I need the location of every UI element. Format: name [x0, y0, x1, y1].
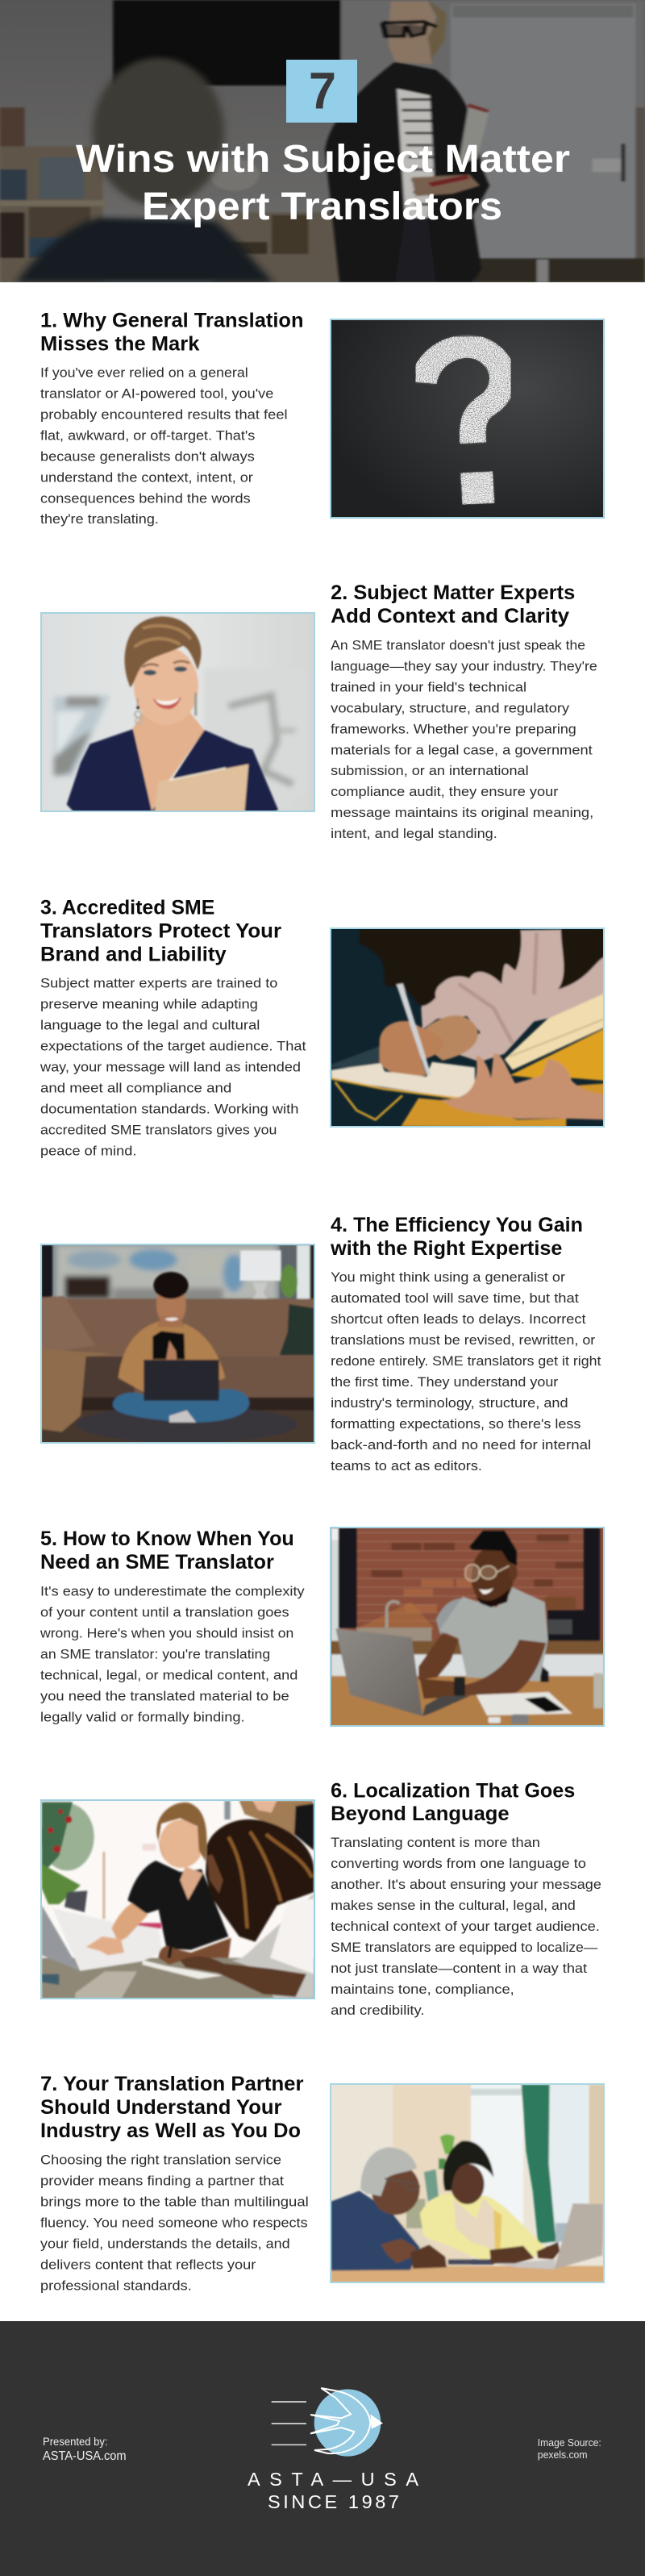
heading 7: 7. Your Translation Partner — [40, 2073, 304, 2095]
heading 5 — [40, 1528, 294, 1574]
panel: section 3 — [40, 897, 605, 1158]
body text 5: legally valid or formally binding. — [40, 1709, 245, 1724]
heading 5: Need an SME Translator — [40, 1551, 274, 1574]
panel: section 1 — [40, 310, 605, 527]
heading 2: 2. Subject Matter Experts — [331, 581, 575, 604]
body text 3: expectations of the target audience. That — [40, 1038, 306, 1053]
logo wordmark: SINCE 1987 — [268, 2491, 399, 2512]
image source credit: pexels.com — [538, 2449, 587, 2461]
heading 4: with the Right Expertise — [330, 1237, 562, 1260]
heading 1 — [40, 310, 303, 355]
body text 7: Choosing the right translation service — [40, 2152, 281, 2168]
body text 5: you need the translated material to be — [40, 1688, 289, 1703]
body text 5: an SME translator: you're translating — [40, 1646, 270, 1661]
body text 3: accredited SME translators gives you — [40, 1122, 277, 1137]
body text 4: You might think using a generalist or — [331, 1269, 566, 1285]
body text 2: submission, or an international — [331, 763, 529, 778]
heading 7 — [40, 2073, 304, 2142]
title: Expert Translators — [142, 185, 502, 228]
heading 1: 1. Why General Translation — [40, 310, 303, 332]
hero banner — [0, 0, 645, 282]
body text 2: An SME translator doesn't just speak the — [331, 637, 585, 653]
image source credit: Image Source: — [538, 2436, 601, 2449]
badge with number 7 — [286, 60, 357, 123]
heading 6: 6. Localization That Goes — [331, 1779, 575, 1802]
body text 1: probably encountered results that feel — [40, 406, 288, 423]
body text 6: another. It's about ensuring your message — [331, 1877, 601, 1892]
body text 6: technical context of your target audience. — [331, 1919, 600, 1934]
body text 1: flat, awkward, or off-target. That's — [40, 427, 255, 443]
body text 2: compliance audit, they ensure your — [331, 784, 559, 799]
panel: section 6 — [40, 1779, 601, 2018]
body text 4: the first time. They understand your — [331, 1374, 559, 1390]
badge with number 7: 7 — [309, 61, 336, 119]
heading 4 — [330, 1214, 583, 1260]
body text 4 — [331, 1269, 601, 1473]
heading 2 — [331, 581, 575, 627]
photo: man smiling at laptop — [330, 1527, 605, 1727]
heading 4: 4. The Efficiency You Gain — [331, 1214, 583, 1236]
body text 6: not just translate—content in a way that — [331, 1961, 588, 1976]
body text 6: and credibility. — [331, 2003, 424, 2018]
panel: section 4 — [40, 1214, 601, 1473]
logo: ASTA-USA bird — [272, 2388, 383, 2457]
body text 5: technical, legal, or medical content, and — [40, 1667, 298, 1682]
body text 3: documentation standards. Working with — [40, 1101, 298, 1116]
body text 7: brings more to the table than multilingual — [40, 2194, 309, 2210]
body text 2: intent, and legal standing. — [331, 826, 497, 841]
body text 1: consequences behind the words — [40, 490, 251, 506]
body text 2 — [331, 637, 597, 841]
presented by credit — [43, 2436, 127, 2463]
photo: woman with laptop on sofa — [40, 1244, 315, 1444]
body text 3: and meet all compliance and — [40, 1080, 231, 1095]
body text 6: converting words from one language to — [331, 1856, 586, 1871]
body text 3: peace of mind. — [40, 1144, 136, 1158]
hero background photo — [0, 0, 645, 282]
body text 3: preserve meaning while adapting — [40, 996, 258, 1011]
body text 2: frameworks. Whether you're preparing — [331, 721, 576, 736]
photo: chalk question mark — [330, 319, 605, 519]
body text 3: way, your message will land as intended — [40, 1059, 301, 1074]
photo: person writing in yellow notebook — [330, 927, 605, 1128]
heading 5: 5. How to Know When You — [40, 1528, 294, 1550]
body text 7: professional standards. — [40, 2278, 192, 2294]
body text 5: of your content until a translation goes — [40, 1604, 289, 1619]
photo: colleagues working with laptop — [40, 1799, 315, 1999]
body text 1: because generalists don't always — [40, 448, 255, 464]
body text 3: Subject matter experts are trained to — [40, 975, 277, 990]
heading 6 — [331, 1779, 575, 1825]
heading 3 — [40, 897, 281, 966]
panel: section 2 — [40, 581, 597, 841]
heading 6: Beyond Language — [331, 1803, 510, 1825]
heading 1: Misses the Mark — [40, 332, 199, 355]
body text 1: they're translating. — [40, 511, 159, 527]
body text 5 — [40, 1583, 305, 1724]
body text 1 — [40, 365, 288, 527]
body text 6: maintains tone, compliance, — [331, 1982, 514, 1997]
presented by credit: ASTA-USA.com — [43, 2449, 127, 2463]
body text 1: understand the context, intent, or — [40, 469, 253, 485]
body text 4: shortcut often leads to delays. Incorrect — [331, 1311, 586, 1327]
heading 3: Brand and Liability — [40, 944, 227, 966]
body text 4: back-and-forth and no need for internal — [331, 1437, 591, 1453]
title — [76, 138, 570, 228]
body text 7: your field, understands the details, and — [40, 2236, 290, 2252]
panel: section 7 — [40, 2073, 605, 2294]
body text 6 — [331, 1835, 601, 2018]
photo: smiling woman with clipboard — [40, 612, 315, 812]
heading 7: Industry as Well as You Do — [40, 2120, 301, 2142]
title: Wins with Subject Matter — [76, 138, 570, 181]
footer — [0, 2321, 645, 2576]
body text 2: message maintains its original meaning, — [331, 805, 593, 820]
body text 2: trained in your field's technical — [331, 679, 526, 694]
body text 7 — [40, 2152, 309, 2294]
logo wordmark: ASTA—USA — [248, 2469, 418, 2490]
body text 6: SME translators are equipped to localize— — [331, 1940, 598, 1955]
heading 7: Should Understand Your — [40, 2096, 282, 2119]
body text 3: language to the legal and cultural — [40, 1017, 260, 1032]
body text 4: teams to act as editors. — [331, 1458, 482, 1473]
heading 2: Add Context and Clarity — [331, 605, 569, 627]
body text 6: Translating content is more than — [331, 1835, 540, 1850]
presented by credit: Presented by: — [43, 2436, 108, 2448]
body text 7: fluency. You need someone who respects — [40, 2215, 308, 2231]
body text 5: It's easy to underestimate the complexity — [40, 1583, 305, 1599]
body text 4: industry's terminology, structure, and — [331, 1395, 568, 1411]
body text 5: wrong. Here's when you should insist on — [40, 1625, 293, 1640]
panel: section 5 — [40, 1527, 605, 1727]
heading 3: 3. Accredited SME — [40, 897, 214, 919]
body text 7: provider means finding a partner that — [40, 2173, 284, 2189]
body text 7: delivers content that reflects your — [40, 2257, 256, 2273]
logo wordmark — [248, 2469, 418, 2512]
heading 3: Translators Protect Your — [40, 920, 281, 943]
body text 1: translator or AI-powered tool, you've — [40, 386, 273, 402]
body text 2: language—they say your industry. They're — [331, 658, 597, 674]
body text 4: formatting expectations, so there's less — [331, 1416, 580, 1432]
body text 3 — [40, 975, 306, 1158]
body text 2: vocabulary, structure, and regulatory — [331, 700, 570, 715]
body text 4: automated tool will save time, but that — [331, 1290, 579, 1306]
image source credit — [538, 2436, 601, 2461]
body text 1: If you've ever relied on a general — [40, 365, 248, 381]
body text 2: materials for a legal case, a government — [331, 742, 593, 757]
photo: older man and woman at laptop — [330, 2083, 605, 2283]
body text 6: makes sense in the cultural, legal, and — [331, 1898, 576, 1913]
body text 4: translations must be revised, rewritten, or — [331, 1332, 596, 1348]
body text 4: redone entirely. SME translators get it right — [331, 1353, 601, 1369]
